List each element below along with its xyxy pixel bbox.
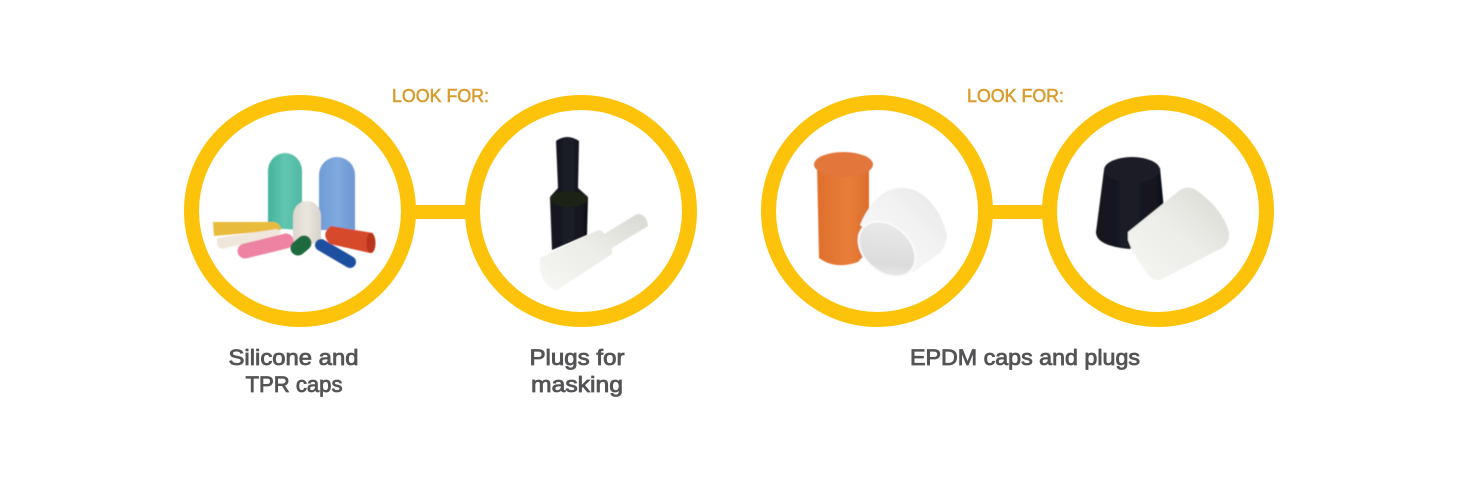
circle: EPDM plugs xyxy=(1050,102,1266,320)
yellow ring xyxy=(472,102,690,320)
white plug xyxy=(540,214,648,290)
white cap rim xyxy=(848,210,926,288)
heading: look for, left group: LOOK FOR: xyxy=(392,85,489,106)
navy tube xyxy=(321,245,350,262)
dark green cap xyxy=(298,243,304,248)
teal cap xyxy=(268,153,302,230)
pink tube xyxy=(245,241,286,251)
circle: EPDM caps xyxy=(768,102,986,320)
cream long tube xyxy=(217,229,281,249)
group: EPDM caps and plugs xyxy=(768,85,1266,370)
group: silicone and TPR caps / plugs for masking xyxy=(192,85,690,397)
white flared cap xyxy=(860,188,947,273)
product image: orange cap and white cap xyxy=(814,152,947,288)
product image: black and white masking plugs xyxy=(540,137,648,290)
caption: plugs for masking: masking xyxy=(531,372,623,397)
yellow ring xyxy=(192,102,408,320)
caption: silicone and TPR caps: TPR caps xyxy=(246,372,342,397)
caption: EPDM caps and plugs: EPDM caps and plugs xyxy=(910,345,1140,370)
caption: silicone and TPR caps: Silicone and xyxy=(228,345,358,370)
product image: assorted coloured caps xyxy=(213,153,376,262)
blue cap xyxy=(319,157,355,230)
caption: plugs for masking: Plugs for xyxy=(530,345,624,370)
black plug xyxy=(550,137,588,250)
cream small cap xyxy=(293,201,321,244)
connector between left circles xyxy=(410,205,470,219)
yellow ring xyxy=(768,102,986,320)
heading: look for, right group: LOOK FOR: xyxy=(967,85,1064,106)
red tube xyxy=(325,226,373,253)
circle: plugs for masking xyxy=(472,102,690,320)
connector between right circles xyxy=(986,205,1046,219)
circle: silicone and TPR caps xyxy=(192,102,408,320)
black plug xyxy=(1096,168,1165,249)
yellow tube xyxy=(213,222,281,236)
orange cap lid xyxy=(814,152,873,177)
orange cap body xyxy=(817,165,869,265)
product image: black and white tapered plugs xyxy=(1096,157,1229,280)
yellow ring xyxy=(1050,102,1266,320)
white plug xyxy=(1128,188,1229,280)
